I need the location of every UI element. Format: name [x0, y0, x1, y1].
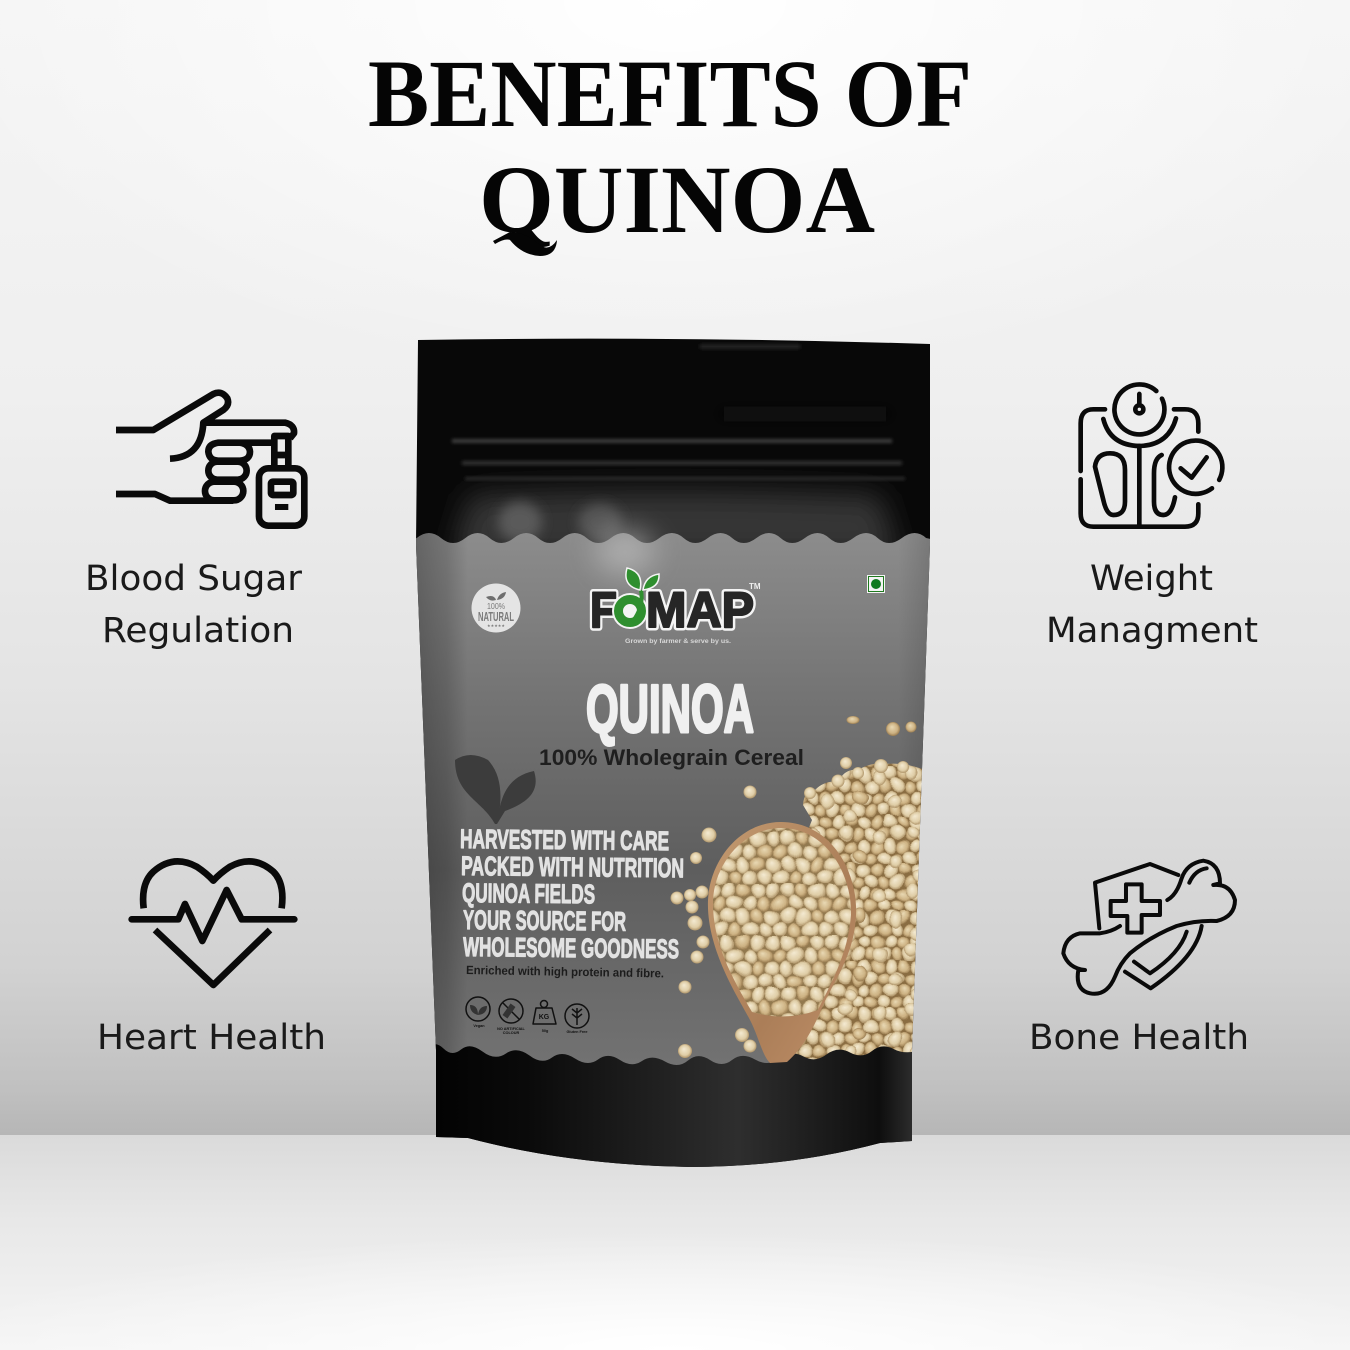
badge: 100% natural: NATURAL	[478, 609, 514, 624]
tagline text: QUINOA FIELDS	[462, 878, 595, 909]
icon: heart with pulse	[132, 861, 294, 985]
diet icons row: Vegan	[473, 1024, 485, 1028]
label: weight management: Weight	[1090, 559, 1213, 599]
product subtitle: 100% Wholegrain Cereal	[539, 745, 804, 770]
badge: 100% natural: 100%	[487, 601, 505, 611]
scattered grains	[670, 716, 916, 1058]
background: floor	[0, 1135, 1350, 1350]
tagline text	[460, 824, 684, 964]
label: blood sugar regulation: Regulation	[102, 611, 294, 651]
tagline text: YOUR SOURCE FOR	[463, 905, 626, 937]
diet icons row: NO ARTIFICIAL	[497, 1027, 526, 1031]
pouch: black body	[410, 335, 940, 1175]
logo: FoMAP: TM	[749, 582, 761, 591]
tagline text: PACKED WITH NUTRITION	[461, 851, 684, 883]
label: weight management: Managment	[1046, 611, 1258, 651]
tagline text: HARVESTED WITH CARE	[460, 824, 669, 856]
tagline text: WHOLESOME GOODNESS	[463, 932, 679, 964]
diet icons row: COLOUR	[503, 1031, 519, 1035]
product name: QUINOA	[586, 671, 754, 747]
quinoa grain pile	[795, 764, 922, 1060]
logo: FoMAP: Grown by farmer & serve by us.	[625, 638, 731, 645]
pouch: black base	[436, 1044, 912, 1167]
diet icons row: Gluten Free	[566, 1030, 588, 1034]
leaf watermark	[455, 755, 536, 824]
title	[368, 40, 972, 256]
label: heart health: Heart Health	[97, 1018, 326, 1058]
badge: 100% natural	[472, 584, 520, 632]
wooden spoon with grains	[700, 815, 860, 1063]
title: BENEFITS OF	[368, 40, 972, 147]
diet icons row: 50g	[542, 1029, 549, 1033]
title: QUINOA	[479, 146, 875, 253]
logo: FoMAP: F	[590, 582, 617, 638]
label: bone health: Bone Health	[1029, 1018, 1249, 1058]
logo: FoMAP: MAP	[646, 582, 754, 638]
label: weight management	[1046, 559, 1258, 651]
pouch: grey label panel	[410, 530, 935, 1075]
diet icons row	[466, 997, 589, 1035]
icon: bone with shield and cross	[1063, 861, 1235, 994]
label: blood sugar regulation: Blood Sugar	[85, 559, 303, 599]
label: blood sugar regulation	[85, 559, 303, 651]
logo: FoMAP: F	[590, 582, 617, 638]
product pouch	[410, 335, 940, 1180]
icon: veg mark	[867, 575, 885, 593]
logo: FoMAP	[590, 568, 761, 645]
pouch: zip folds	[450, 344, 905, 560]
logo: FoMAP: MAP	[646, 582, 754, 638]
icon: blood sugar meter and hand	[116, 393, 304, 526]
badge: 100% natural: ★★★★★	[487, 623, 505, 628]
diet icons row: KG	[539, 1014, 550, 1021]
enriched note: Enriched with high protein and fibre.	[466, 963, 664, 980]
icon: weight scale with check	[1081, 384, 1222, 527]
